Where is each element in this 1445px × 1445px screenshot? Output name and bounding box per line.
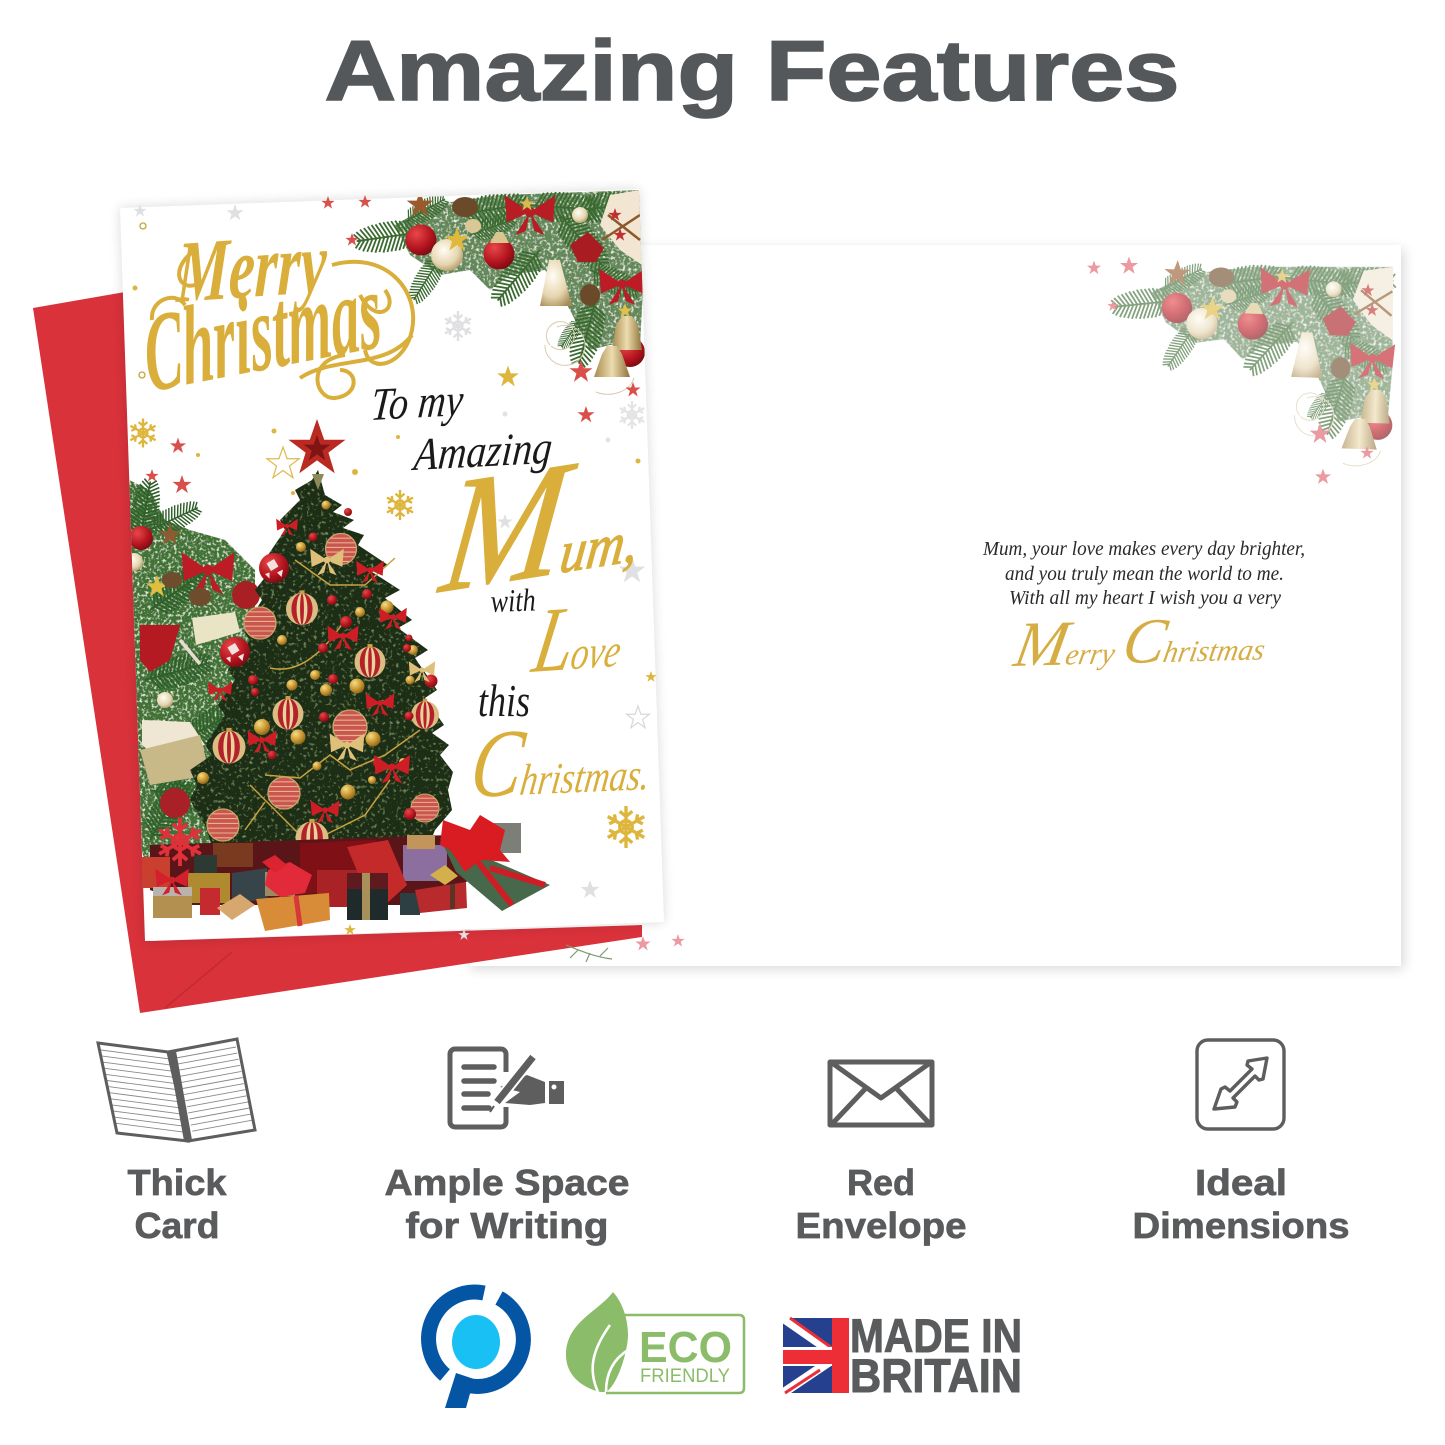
panel: greeting card front [120,188,664,941]
label: Ample Space for Writing: Ample Space [384,1162,630,1203]
panel: card inside page [470,245,1404,969]
text: Christmas: Christmas. [465,703,659,818]
inside verse: With all my heart I wish you a very [1009,588,1281,609]
label: Ideal Dimensions [1132,1162,1350,1246]
inside page garland decoration [1104,255,1398,467]
text: this: this [478,675,530,726]
left garland behind tree [125,477,260,860]
label: Thick Card: Card [134,1205,220,1246]
inside verse: Mum, your love makes every day brighter, [982,539,1305,560]
red envelope [33,292,642,1013]
text: with: with [490,581,536,619]
logo: blue circular mark [429,1292,523,1408]
inside greeting: Merry Christmas [1008,602,1274,680]
text: To my Amazing [369,374,554,480]
label: Ample Space for Writing: for Writing [406,1205,608,1246]
tree bows [208,519,435,823]
icon: thick card [98,1039,255,1141]
text: To my Amazing: Amazing [410,422,554,480]
logo: made in britain [783,1309,1022,1402]
label: Thick Card: Thick [128,1162,228,1203]
logo: made in britain: MADE IN [850,1309,1022,1362]
text: Mum: Mum, [432,415,653,629]
garlands on tree [245,558,420,840]
label: Ideal Dimensions: Dimensions [1132,1205,1350,1246]
title: Amazing Features [324,24,1180,119]
text: To my Amazing: To my [369,374,466,430]
heading: Merry Christmas [139,213,413,417]
label: Red Envelope: Envelope [796,1205,966,1246]
label: Red Envelope: Red [847,1162,915,1203]
text: Love: Love [525,584,632,693]
label: Ideal Dimensions: Ideal [1195,1162,1287,1203]
gold baubles [197,500,418,800]
logo: made in britain: BRITAIN [850,1349,1022,1402]
label: Thick Card [128,1162,228,1246]
icon: ample space for writing [450,1049,564,1127]
logo: eco friendly [566,1292,744,1393]
christmas tree [190,419,453,855]
striped baubles [207,534,439,854]
icon: ideal dimensions [1197,1040,1284,1129]
logo: eco friendly: FRIENDLY [640,1366,730,1387]
wrapped presents [142,815,550,931]
inside page stars [635,256,1374,950]
heading: Merry Christmas: Merry [174,213,329,322]
inside verse [982,539,1305,609]
scattered stars and snowflakes [130,195,657,940]
red baubles [248,508,438,820]
inside verse: and you truly mean the world to me. [1005,564,1284,585]
card corner garland [353,188,645,394]
logo: eco friendly: ECO [639,1323,732,1372]
label: Ample Space for Writing [384,1162,630,1246]
tree topper star [267,419,346,490]
icon: envelope [830,1062,932,1125]
label: Red Envelope [796,1162,966,1246]
icon: union flag [783,1318,849,1393]
heading: Merry Christmas: Christmas [139,247,386,417]
